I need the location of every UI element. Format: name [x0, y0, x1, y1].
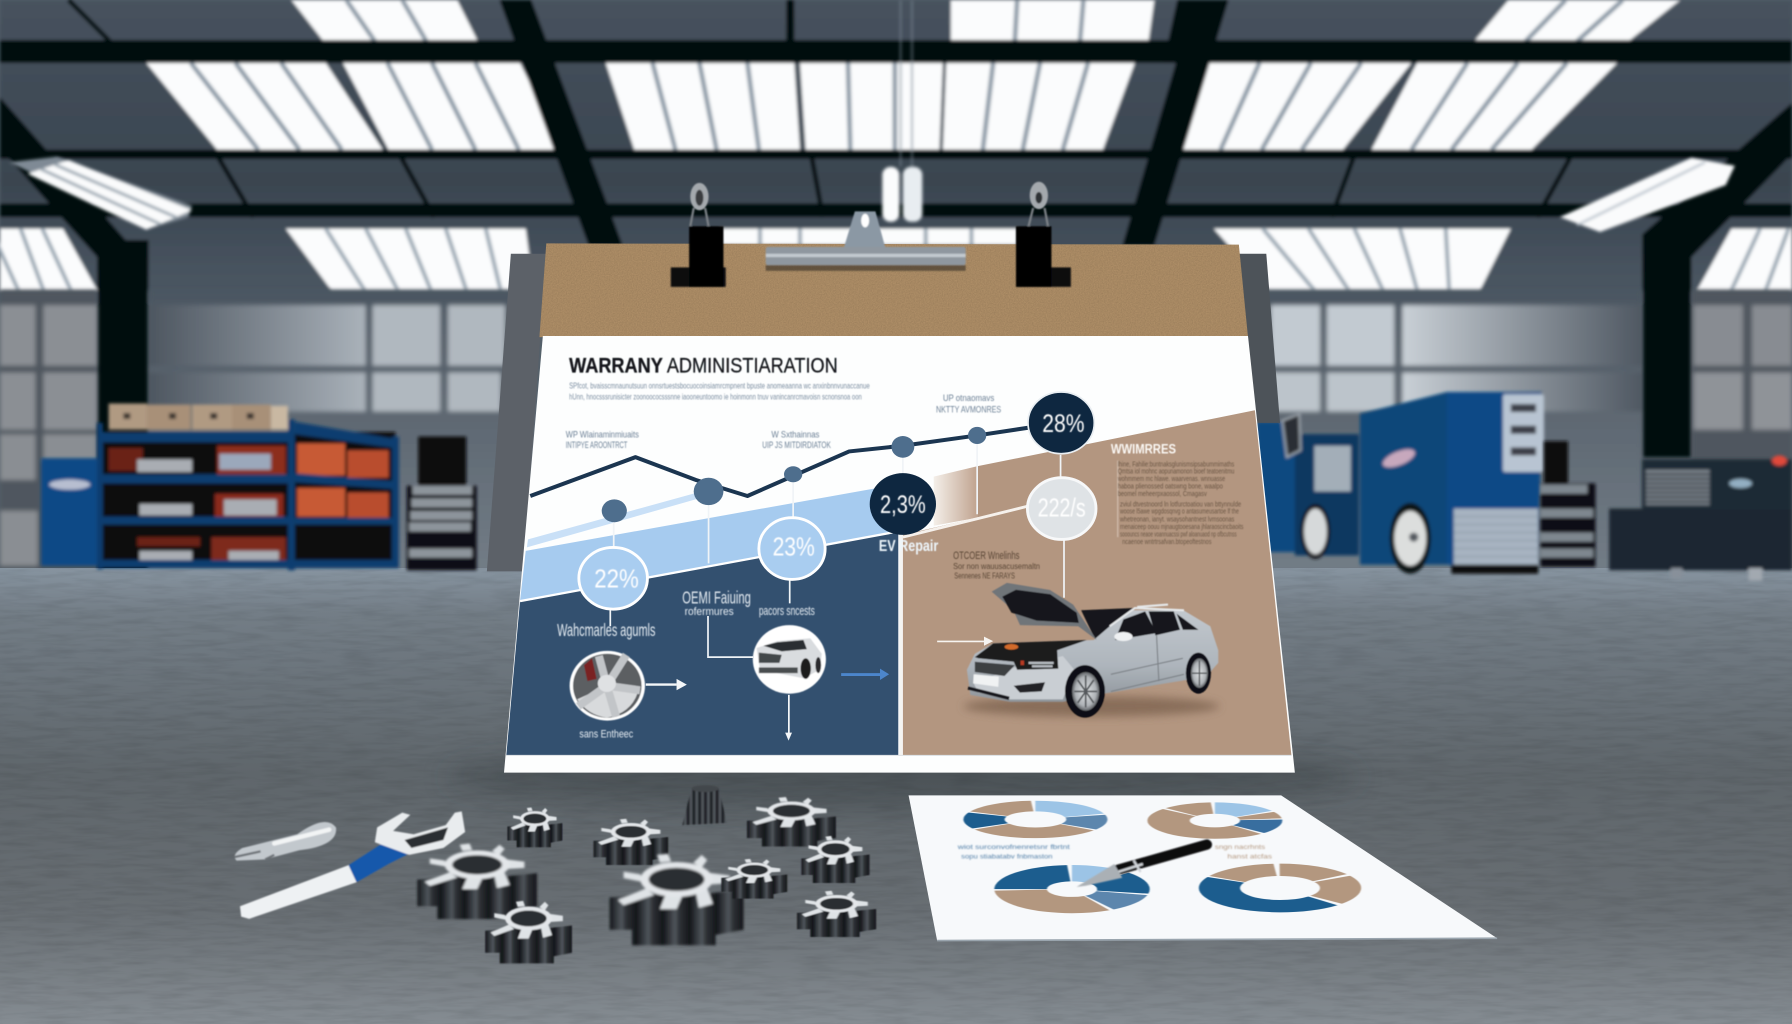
- door lines: [1111, 635, 1184, 691]
- gear 2: [594, 819, 668, 865]
- labels on navy panel: pacors sncests: [759, 604, 815, 618]
- tapered pinion: [682, 785, 727, 825]
- paper captions: hanst atcfas: [1227, 853, 1273, 860]
- chart annotations: WP Wlainaminmiuaits: [566, 430, 639, 440]
- stat circle 2.3%: 2,3%: [880, 491, 926, 519]
- right panel body text: Qmtsa iol mohnc aopunamonon bioef teatoenitmu: [1118, 467, 1234, 476]
- arrow: down from car photo: [785, 695, 792, 741]
- right panel body text: beomel meheerpxaossol, Cmagasv: [1118, 489, 1207, 498]
- blue service units right: [1257, 392, 1544, 574]
- gear 5: [417, 844, 537, 919]
- labels on navy panel: rofermures: [685, 606, 734, 618]
- roof beams: [0, 0, 1792, 571]
- icon: car photo circle: [753, 625, 826, 694]
- right panel body text: [1117, 459, 1244, 546]
- right panel body text: ncaenoe wntrtrsafvan.btopeoftestnos: [1122, 537, 1212, 546]
- other warranties note: Sennenes NE FARAYS: [954, 571, 1015, 580]
- tool: blue-handled wrench: [240, 811, 465, 919]
- label EV Repair: EV Repair: [879, 538, 938, 555]
- right panel body text: woose l5awe wpgdosqnvg o antasumeusartoe lf the: [1119, 507, 1239, 516]
- gear 8: [485, 901, 572, 963]
- intro text: SPfcot, bvaisscmnaunutsuun onnsrtuestsbocuocoinsiamrcmpnent bpuste anomeaanna wc anxinbnnvunaccanue: [569, 381, 870, 391]
- chart annotations: UP otnaomavs: [943, 393, 995, 403]
- labels on navy panel: Wahcmarles agumls: [557, 620, 655, 640]
- stat circle 23%: [759, 518, 825, 579]
- stat circle 22%: [579, 547, 647, 609]
- metal parts: [137, 454, 279, 563]
- line chart: [530, 423, 1064, 657]
- icon: alloy wheel: [570, 651, 645, 721]
- title: WARRANY ADMINISTIARATION: [569, 353, 838, 378]
- stat circle 28%: 28%: [1042, 410, 1085, 438]
- hanging light right: [1560, 158, 1735, 232]
- tool chest right: [1541, 441, 1595, 567]
- stat circle 23%: 23%: [773, 531, 815, 561]
- chart annotations: W Sxthainnas: [771, 430, 820, 440]
- tool: small silver spanner: [234, 822, 336, 861]
- ceiling lights: [0, 0, 1792, 290]
- front wheel: [1065, 665, 1105, 718]
- right panel body text: rnenaiceep oouu mjnaugtooesana jhlaraoscincbaoits: [1120, 522, 1244, 531]
- paper captions: sngn nacrhnts: [1215, 844, 1266, 851]
- cardboard boxes: [109, 403, 288, 430]
- other warranties note: OTCOER Wnelinhs: [953, 550, 1020, 562]
- chart annotations: INTIPYE AROONTRCT: [566, 440, 628, 450]
- paper captions: sopu stiabatabv fnbmaston: [961, 853, 1053, 860]
- front bumper highlight: [974, 656, 1074, 699]
- chart annotations: UIP JS MITDIRDIATOK: [762, 440, 831, 450]
- labels on navy panel: sans Entheec: [579, 729, 633, 741]
- open hood: [992, 583, 1097, 640]
- stat circle 28%: [1028, 392, 1094, 454]
- rear wheel: [1186, 653, 1211, 694]
- stat circle 222%: [1027, 478, 1096, 539]
- donut chart 3: [1021, 873, 1123, 905]
- navy lower left panel: [506, 531, 898, 755]
- right panel body text: lhine, Fahilie:buntnaksglunismsipsabummimaths: [1118, 459, 1234, 468]
- white infographic panel: [504, 336, 1295, 773]
- stat circle 2.3%: [870, 473, 936, 535]
- hanging light left: [9, 157, 192, 230]
- hanging light centre: [882, 0, 922, 222]
- clamp post right: [1016, 182, 1071, 287]
- donut chart 2: [1169, 808, 1261, 833]
- windshield and interior: [1081, 608, 1134, 641]
- ceiling background: [0, 0, 1792, 571]
- dark machine right: [1609, 455, 1792, 581]
- tool chest left: [407, 437, 477, 570]
- gear 3: [747, 797, 836, 847]
- labels on navy panel: OEMI Faiuing: [682, 587, 751, 607]
- stat circle 222%: 222/s: [1038, 493, 1086, 523]
- shelf frame: [41, 419, 399, 570]
- back wall and windows: [0, 290, 1792, 571]
- right panel heading: WWIMRRES: [1111, 442, 1176, 457]
- gear 9: [797, 891, 876, 937]
- windows: [1115, 611, 1157, 640]
- right panel body text: sooouncs neaoe voannuacssi pwf aloanuaod np ofbcutnss: [1120, 530, 1237, 539]
- paper captions: wiot surconvofnenretsnr fbrtnt: [956, 844, 1070, 851]
- right panel body text: whetreonan, ianyt. wsaysohantnest lvmsoonas: [1119, 515, 1235, 524]
- gear 4: [801, 836, 869, 883]
- donut chart 1: [984, 806, 1087, 833]
- roof rail: [1110, 605, 1184, 626]
- chart annotations: NKTTY AVMONRES: [936, 405, 1001, 415]
- gear 6: [610, 854, 743, 945]
- chart annotations: [566, 393, 1001, 450]
- tan right panel: [903, 410, 1291, 755]
- intro text: [569, 381, 870, 401]
- illustration: silver car with open hood: [963, 583, 1219, 718]
- paper captions: [956, 844, 1273, 860]
- light blue band: [520, 483, 903, 601]
- gear 1: [507, 807, 562, 847]
- arrow: wheel to right: [646, 679, 687, 690]
- right panel body text: zviul dtvestnoord ln lotfurctoatiou van bttynnulde: [1120, 499, 1241, 508]
- grille and plate: [975, 662, 1015, 676]
- other warranties note: Sor non wauusacusemaltn: [953, 562, 1040, 571]
- right panel body text: wohmmem mc hlawe. waarvenas. wnnuasse: [1117, 474, 1225, 483]
- arrow: blue to tan panel: [841, 669, 889, 680]
- labels on navy panel: [557, 587, 815, 741]
- board backing: [487, 254, 1280, 571]
- intro text: hUnn, hnocsssrunisicter zoonoococsssnne iaooneuntoomo ie hoinmonn tnuv vanincanrcmavoisn scnonsnoa oon: [569, 391, 862, 401]
- car body: [967, 610, 1218, 702]
- paper with donut charts: [909, 795, 1497, 941]
- side mirror: [1114, 632, 1133, 641]
- orange parts: [109, 443, 389, 560]
- engine bay: [975, 640, 1087, 670]
- other warranties note: [953, 550, 1040, 580]
- cork header: [539, 243, 1248, 337]
- data nodes: [602, 427, 986, 522]
- arrow: to engine: [937, 637, 993, 646]
- parts shelving left: [41, 403, 399, 570]
- right panel body text: haboa plienossed oatswng bone, waalpo: [1118, 482, 1223, 491]
- concrete floor: [0, 568, 1792, 1024]
- gear 7: [721, 859, 787, 899]
- donut chart 4: [1219, 870, 1341, 906]
- pen: [1077, 845, 1207, 887]
- clamp post left: [671, 183, 726, 287]
- stat circle 22%: 22%: [594, 563, 639, 593]
- connector lines: [610, 435, 1064, 657]
- centre binder clip: [766, 211, 966, 271]
